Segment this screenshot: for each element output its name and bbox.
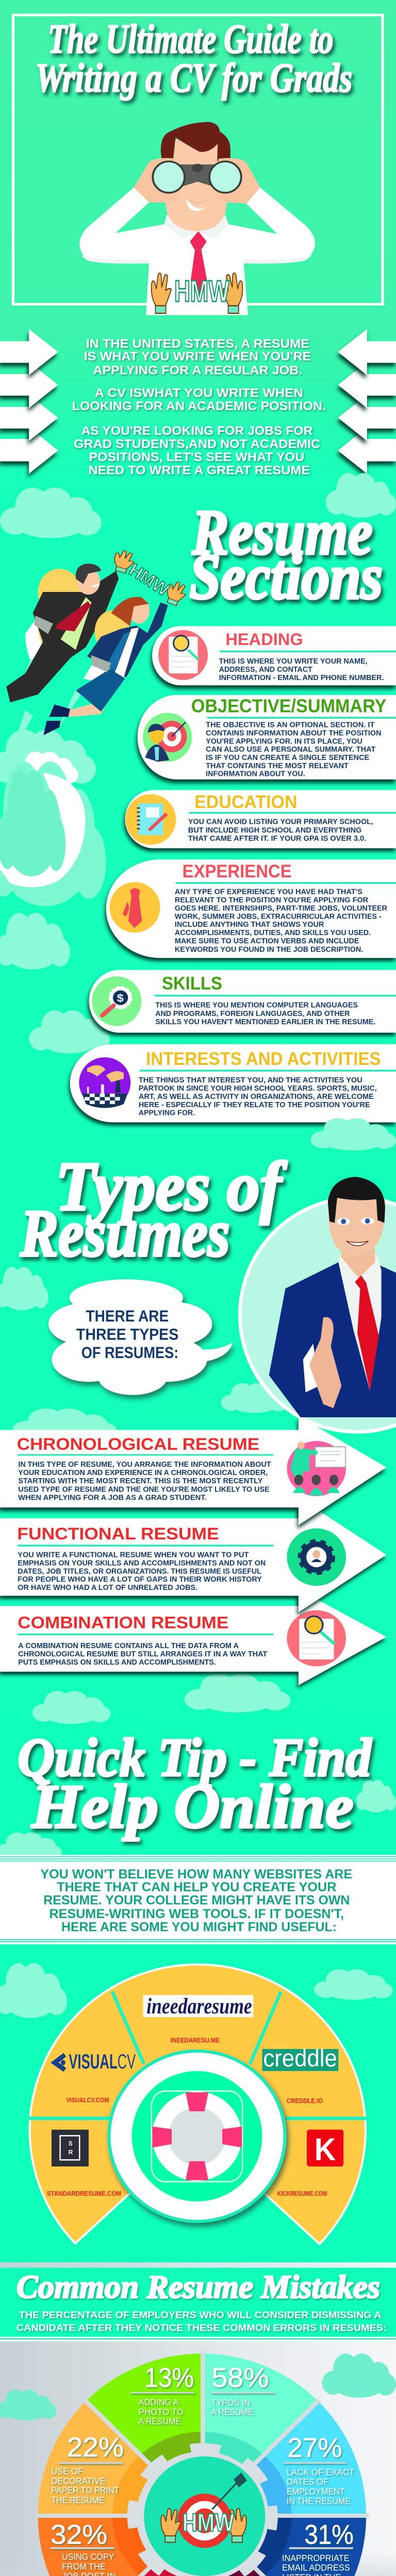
segment: 36% xyxy=(202,2516,318,2576)
subtitle line 2: CANDIDATE AFTER THEY NOTICE THESE COMMON ERRORS IN RESUMES: xyxy=(16,2323,386,2333)
hero section xyxy=(13,15,383,363)
tool: ineedaresume: INEEDARESU.ME xyxy=(171,2037,220,2044)
stat labels xyxy=(51,2362,355,2576)
panel body text: STARTING WITH THE MOST RECENT. THIS IS THE MOST RECENTLY xyxy=(18,1477,263,1485)
card heading text: SKILLS xyxy=(162,973,222,993)
tool wheel xyxy=(29,1964,366,2244)
divider bar xyxy=(0,2262,396,2268)
stat: 13% adding a photo: ADDING A xyxy=(138,2397,179,2408)
stat: 58% typos: A RESUME xyxy=(211,2406,253,2417)
stat: 27% exact dates: EMPLOYMENT xyxy=(287,2486,345,2497)
illustration: businessman handshake xyxy=(240,1177,396,1432)
card body text: THAT CAME AFTER IT. IF YOUR GPA IS OVER 3.0. xyxy=(188,835,366,843)
card body text: RELEVANT TO THE POSITION YOU'RE APPLYING FOR xyxy=(175,896,368,904)
help online text: RESUME. YOUR COLLEGE MIGHT HAVE ITS OWN xyxy=(43,1893,350,1907)
icon: notebook xyxy=(125,794,176,845)
stat: 22% decorative paper: DECORATIVE xyxy=(51,2476,106,2486)
logo: HMW xyxy=(152,273,242,313)
stat: 22% decorative paper xyxy=(51,2432,124,2505)
arrow panel: combination resume xyxy=(0,1589,386,1685)
stat: 13% adding a photo: A RESUME xyxy=(138,2416,181,2426)
stat: 27% exact dates: 27% xyxy=(287,2433,342,2463)
card: skills xyxy=(89,970,396,1032)
card body text xyxy=(155,1001,375,1026)
white band xyxy=(0,1905,396,1944)
stat: 32% copy from job post: USING COPY xyxy=(62,2552,114,2562)
panel body text: DATES, JOB TITLES, OR ORGANIZATIONS. THIS RESUME IS USEFUL xyxy=(18,1567,261,1575)
arrow panel: chronological resume xyxy=(0,1416,386,1525)
intro text start: IN THE UNITED STATES, A RESUME xyxy=(86,337,309,351)
arrows left and right xyxy=(0,427,396,473)
hub: lifebuoy xyxy=(107,2049,287,2223)
clouds xyxy=(0,1118,396,1439)
tool: standardresume: STANDARDRESUME.COM xyxy=(47,2190,121,2197)
white band xyxy=(0,1855,396,1907)
icon: presenter xyxy=(287,1441,346,1496)
types of resumes section xyxy=(0,1118,396,1439)
card body text xyxy=(188,818,373,843)
icon: gear magnifier: $ xyxy=(117,992,124,1004)
heading: Common Resume Mistakes: Common Resume Mistakes xyxy=(16,2268,380,2305)
panel body text: EMPHASIS ON YOUR SKILLS AND ACCOMPLISHMENTS AND NOT ON xyxy=(18,1559,266,1567)
heading: Types of Resumes: Resumes xyxy=(20,1196,230,1270)
target and HMW logo xyxy=(161,2472,247,2548)
bubble text xyxy=(76,1307,178,1362)
gear hub xyxy=(133,2448,273,2576)
stat: 13% adding a photo xyxy=(130,2362,194,2426)
tool: visualcv: CV xyxy=(118,2050,136,2073)
stat: 27% exact dates: LACK OF EXACT xyxy=(287,2467,355,2477)
panel body text: IN THIS TYPE OF RESUME, YOU ARRANGE THE INFORMATION ABOUT xyxy=(18,1461,271,1469)
card body text: THAT CONTAINS THE MOST RELEVANT xyxy=(206,762,349,770)
stat: 27% exact dates: IN THE RESUME xyxy=(287,2496,351,2506)
panel heading: CHRONOLOGICAL RESUME xyxy=(17,1434,259,1453)
clouds xyxy=(0,2353,396,2420)
tool: ineedaresume: ineedaresume xyxy=(146,1994,252,2019)
icon: target and person xyxy=(143,713,192,762)
help online text: THERE THAT CAN HELP YOU CREATE YOUR xyxy=(57,1879,336,1894)
help online text: YOU WON'T BELIEVE HOW MANY WEBSITES ARE xyxy=(40,1867,352,1882)
white frame xyxy=(13,15,383,304)
resume type arrows lower xyxy=(0,1497,396,1862)
tool: kickresume xyxy=(277,2130,343,2197)
stat: 22% decorative paper: THE RESUME xyxy=(51,2495,104,2505)
stat: 27% exact dates: DATES OF xyxy=(287,2477,328,2487)
heading: Types of Resumes: Types of xyxy=(56,1148,288,1225)
panel heading: COMBINATION RESUME xyxy=(18,1614,228,1632)
help online text xyxy=(50,1907,344,1935)
segment: 27% xyxy=(202,2401,366,2516)
segment: 22% xyxy=(38,2401,202,2516)
tool: visualcv xyxy=(51,2050,136,2104)
card: interests and activities xyxy=(70,1044,396,1123)
heading: Quick Tip - Find Help Online: Help Online xyxy=(31,1772,354,1841)
clouds xyxy=(0,473,396,538)
arrow panel: functional resume xyxy=(0,1497,386,1612)
card body text: HERE - ESPECIALLY IF THEY RELATE TO THE POSITION YOU'RE xyxy=(139,1101,370,1109)
common mistakes section xyxy=(0,2323,396,2576)
bubble text: THERE ARE xyxy=(86,1307,169,1325)
card body text: CAN ALSO USE A PERSONAL SUMMARY. THAT xyxy=(206,745,375,754)
card body text: ART, AS WELL AS ACTIVITY IN ORGANIZATIONS, ARE WELCOME xyxy=(139,1093,374,1101)
card: experience xyxy=(106,859,396,958)
illustration: man with binoculars xyxy=(79,122,315,315)
heading: Quick Tip - Find Help Online xyxy=(18,1727,372,1841)
intro text: NEED TO WRITE A GREAT RESUME xyxy=(88,463,310,477)
tool: ineedaresume xyxy=(143,1994,253,2044)
help online text: HERE ARE SOME YOU MIGHT FIND USEFUL: xyxy=(61,1920,337,1935)
panel body text xyxy=(18,1551,266,1592)
card body text xyxy=(219,657,384,682)
intro text start xyxy=(84,337,311,363)
panel body text xyxy=(18,1642,268,1667)
segment: 35% xyxy=(86,2516,202,2576)
stat: 31% inappropriate email: 31% xyxy=(304,2519,354,2550)
title xyxy=(36,16,352,101)
heading: Resume Sections xyxy=(189,497,383,613)
card body text: YOU CAN AVOID LISTING YOUR PRIMARY SCHOOL, xyxy=(188,818,373,826)
stat: 31% inappropriate email: EMAIL ADDRESS xyxy=(282,2563,350,2573)
illustration: jetpack businesspeople xyxy=(5,548,189,771)
panel heading: FUNCTIONAL RESUME xyxy=(17,1524,219,1544)
panel body text: YOUR EDUCATION AND EXPERIENCE IN A CHRONOLOGICAL ORDER, xyxy=(18,1469,268,1477)
intro text: POSITIONS, LET'S SEE WHAT YOU xyxy=(89,450,304,464)
stat: 58% typos: 58% xyxy=(211,2362,269,2393)
segment: 13% xyxy=(86,2353,202,2516)
tool: standardresume: R xyxy=(69,2148,73,2156)
card body text: THIS IS WHERE YOU MENTION COMPUTER LANGUAGES xyxy=(155,1001,358,1009)
illustration: jetpack businesspeople: HMW xyxy=(126,560,173,601)
bubble text: OF RESUMES: xyxy=(81,1344,178,1362)
panel body text xyxy=(18,1461,271,1502)
intro text: APPLYING FOR A REGULAR JOB. xyxy=(93,363,302,377)
panel body text: FOR PEOPLE WHO HAVE A LOT OF GAPS IN THEIR WORK HISTORY xyxy=(18,1575,262,1584)
intro and resume sections top xyxy=(0,329,396,787)
stat: 31% inappropriate email: INAPPROPRIATE xyxy=(282,2553,349,2563)
stat: 13% adding a photo: 13% xyxy=(144,2362,194,2393)
card body text xyxy=(175,888,387,954)
clouds xyxy=(0,1674,396,1862)
subtitle line 1: THE PERCENTAGE OF EMPLOYERS WHO WILL CONSIDER DISMISSING A xyxy=(19,2310,382,2320)
card heading text: HEADING xyxy=(225,630,303,649)
card body text: THE THINGS THAT INTEREST YOU, AND THE ACTIVITIES YOU xyxy=(139,1076,362,1084)
icon: resume search xyxy=(158,630,208,680)
panel body text: USED TYPE OF RESUME AND THE ONE YOU'RE MOST LIKELY TO USE xyxy=(18,1485,270,1494)
card body text: IS IF YOU CAN CREATE A SINGLE SENTENCE xyxy=(206,754,369,762)
tool: standardresume xyxy=(47,2130,121,2197)
cloud behind jetpack figures xyxy=(0,730,96,787)
card body text: AND PROGRAMS, FOREIGN LANGUAGES, AND OTHER xyxy=(155,1009,350,1018)
clouds xyxy=(0,761,110,1054)
card body text: CONTAINS INFORMATION ABOUT THE POSITION xyxy=(206,729,382,738)
card body text: INFORMATION - EMAIL AND PHONE NUMBER. xyxy=(219,674,384,682)
icon: gear magnifier xyxy=(92,976,141,1026)
stat: 58% typos: TYPOS IN xyxy=(211,2397,250,2408)
heading: Types of Resumes xyxy=(20,1148,288,1270)
card body text: MAKE SURE TO USE ACTION VERBS AND INCLUDE xyxy=(175,937,359,945)
stat: 31% inappropriate email xyxy=(282,2519,354,2576)
speech bubble xyxy=(48,1279,233,1395)
card: heading xyxy=(152,626,396,685)
tool: kickresume: KICKRESUME.COM xyxy=(277,2190,327,2197)
tool: visualcv: VISUAL xyxy=(69,2050,118,2073)
clouds xyxy=(0,1963,393,2018)
tool: standardresume: S xyxy=(69,2140,73,2147)
card heading text: EXPERIENCE xyxy=(183,861,292,882)
stat: 32% copy from job post: 32% xyxy=(51,2519,107,2550)
intro text start: IS WHAT YOU WRITE WHEN YOU'RE xyxy=(84,350,311,363)
help online section xyxy=(0,1727,396,1907)
card body text: BUT INCLUDE HIGH SCHOOL AND EVERYTHING xyxy=(188,826,361,835)
resume section cards xyxy=(0,761,396,1123)
tool: creddle xyxy=(262,2044,338,2105)
desk background xyxy=(0,2342,396,2576)
donut chart xyxy=(36,2350,369,2576)
stat: 22% decorative paper: 22% xyxy=(67,2432,124,2462)
card body text: KEYWORDS YOU FOUND IN THE JOB DESCRIPTION. xyxy=(175,945,363,954)
card body text: INCLUDE ANYTHING THAT SHOWS YOUR xyxy=(175,921,324,929)
help online text: RESUME-WRITING WEB TOOLS. IF IT DOESN'T, xyxy=(50,1907,344,1921)
intro text: AS YOU'RE LOOKING FOR JOBS FOR xyxy=(81,423,312,437)
card heading text: OBJECTIVE/SUMMARY xyxy=(191,696,386,717)
tool: kickresume: K xyxy=(315,2132,336,2167)
panel body text: CHRONOLOGICAL RESUME BUT STILL ARRANGES IT IN A WAY THAT xyxy=(18,1650,268,1658)
card heading text: EDUCATION xyxy=(194,792,297,812)
target and HMW logo: HMW xyxy=(183,2508,234,2536)
card body text: ADDRESS, AND CONTACT xyxy=(219,666,312,674)
intro text: LOOKING FOR AN ACADEMIC POSITION. xyxy=(72,399,326,413)
card body text: YOU'RE APPLYING FOR. IN ITS PLACE, YOU xyxy=(206,737,362,745)
resume tools section xyxy=(0,1905,396,2320)
card: education xyxy=(125,790,396,848)
panel body text: A COMBINATION RESUME CONTAINS ALL THE DATA FROM A xyxy=(18,1642,239,1650)
stat: 27% exact dates xyxy=(283,2433,355,2506)
stripe xyxy=(0,2337,396,2342)
panel body text: PUTS EMPHASIS ON SKILLS AND ACCOMPLISHMENTS. xyxy=(18,1658,216,1667)
stat: 13% adding a photo: PHOTO TO xyxy=(138,2406,184,2417)
card body text: ACCOMPLISHMENTS, DUTIES, AND SKILLS YOU USED. xyxy=(175,929,371,937)
stat: 32% copy from job post xyxy=(51,2519,116,2576)
segment: 58% xyxy=(202,2353,318,2516)
heading: Resume Sections: Resume xyxy=(191,497,372,568)
tool: creddle: CREDDLE.IO xyxy=(287,2097,323,2105)
icon: chess xyxy=(79,1057,130,1108)
panel body text: YOU WRITE A FUNCTIONAL RESUME WHEN YOU WANT TO PUT xyxy=(18,1551,249,1559)
card body text xyxy=(139,1076,377,1117)
card body text xyxy=(206,721,382,778)
card body text: THIS IS WHERE YOU WRITE YOUR NAME, xyxy=(219,657,368,666)
card body text: APPLYING FOR. xyxy=(139,1109,195,1117)
intro text: A CV ISWHAT YOU WRITE WHEN xyxy=(95,386,303,400)
card: objective/summary xyxy=(138,695,396,779)
intro text xyxy=(72,363,326,477)
tool: creddle: creddle xyxy=(263,2044,337,2072)
icon: gear and person xyxy=(287,1529,346,1586)
help online text xyxy=(40,1867,352,1907)
tool: visualcv: VISUALCV.COM xyxy=(66,2096,109,2104)
stat: 22% decorative paper: PAPER TO PRINT xyxy=(51,2485,120,2496)
card body text: ANY TYPE OF EXPERIENCE YOU HAVE HAD THAT'S xyxy=(175,888,362,896)
inner ring shades xyxy=(112,2432,292,2576)
icon: necktie xyxy=(110,882,160,933)
card body text: THE OBJECTIVE IS AN OPTIONAL SECTION. IT xyxy=(206,721,375,730)
logo: HMW: HMW xyxy=(174,274,229,308)
stat: 32% copy from job post: FROM THE xyxy=(62,2561,106,2571)
intro text: GRAD STUDENTS,AND NOT ACADEMIC xyxy=(74,437,320,450)
segment: 32% xyxy=(38,2516,202,2576)
bubble text: THREE TYPES xyxy=(76,1325,178,1344)
segment: 31% xyxy=(202,2516,366,2576)
panel body text: OR HAVE WHO HAD A LOT OF UNRELATED JOBS. xyxy=(18,1584,197,1592)
card body text: INFORMATION ABOUT YOU. xyxy=(206,770,305,778)
stat: 22% decorative paper: USE OF xyxy=(51,2466,83,2476)
stat: 58% typos xyxy=(211,2362,274,2417)
panel body text: WHEN APPLYING FOR A JOB AS A GRAD STUDENT. xyxy=(18,1494,207,1502)
icon: resume search xyxy=(287,1610,346,1666)
